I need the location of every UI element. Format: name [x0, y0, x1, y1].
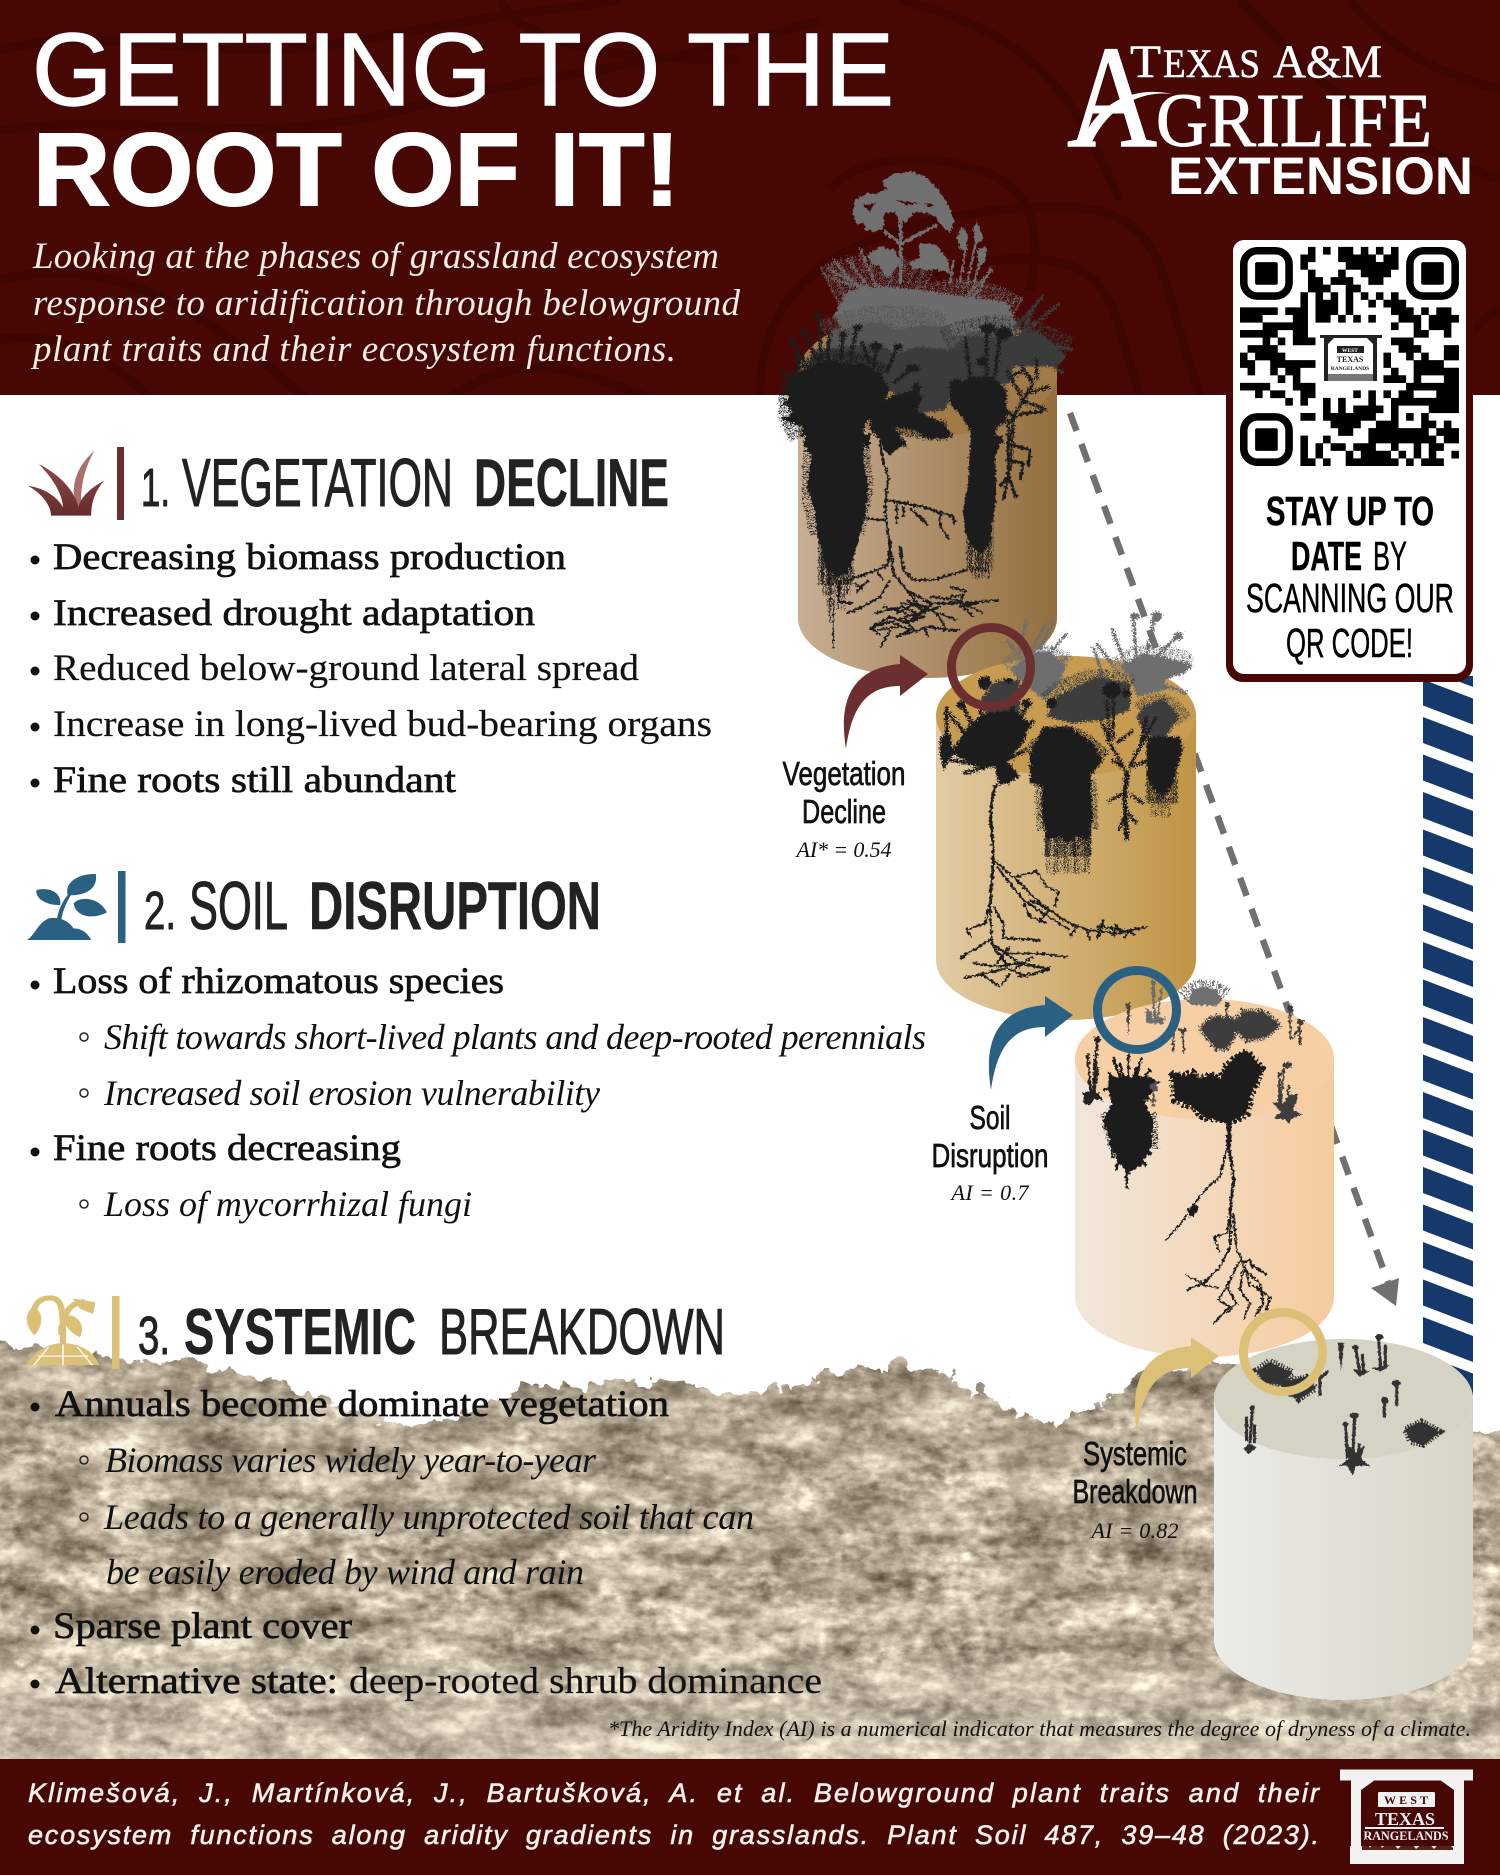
- bullet list: Sparse plant cover: [53, 1606, 352, 1647]
- QR centre mark: West Texas Rangelands: TEXAS: [1337, 355, 1364, 364]
- QR call to action: DATE: [1291, 533, 1362, 579]
- bullet list: Annuals become dominate vegetation: [55, 1384, 669, 1425]
- subtitle: response to aridification through belowground: [33, 283, 740, 324]
- plants: annual remnants: [1243, 1334, 1440, 1475]
- section 1: vegetation decline: 1.: [141, 458, 170, 518]
- citation: [28, 1778, 1320, 1850]
- plant: grasses and flowering clumps: [780, 248, 1073, 470]
- label: systemic breakdown: [1072, 1435, 1198, 1543]
- label: systemic breakdown: Systemic: [1083, 1435, 1187, 1472]
- header band: [0, 0, 1500, 420]
- title: GETTING TO THE: [32, 12, 894, 127]
- arrow: systemic breakdown: [1135, 1337, 1219, 1431]
- cylinder 1: vegetation decline: [780, 172, 1073, 678]
- bullet list: Alternative state:: [55, 1661, 338, 1702]
- QR call to action: QR CODE!: [1286, 620, 1413, 666]
- section 2: soil disruption: SOIL: [189, 868, 288, 944]
- roots: left fibrous mass, right clump, tap root: [803, 412, 1043, 648]
- subtitle: plant traits and their ecosystem functions.: [30, 329, 676, 370]
- logo: Texas A&M AgriLife Extension: A&M: [1273, 36, 1382, 88]
- label: vegetation decline: Vegetation: [782, 755, 906, 792]
- arrow: vegetation decline: [844, 655, 928, 749]
- cylinder 3: soil disruption result: [1075, 980, 1334, 1357]
- dashed trend arrow: [1070, 413, 1399, 1306]
- logo: Texas A&M AgriLife Extension: GRILIFE: [1156, 79, 1432, 163]
- subtitle: [30, 236, 740, 370]
- bullet list: Loss of rhizomatous species: [53, 961, 504, 1002]
- label: vegetation decline: Decline: [802, 793, 886, 830]
- citation: ecosystem functions along aridity gradients in grasslands. Plant Soil 487, 39–48 (2023).: [28, 1820, 1319, 1850]
- bullet list: Increased drought adaptation: [53, 593, 535, 634]
- logo: Texas A&M AgriLife Extension: EXAS: [1163, 41, 1260, 86]
- QR centre mark: West Texas Rangelands: [1320, 335, 1382, 381]
- section 1: vegetation decline: VEGETATION: [182, 445, 453, 521]
- label: vegetation decline: [782, 755, 906, 862]
- label: soil disruption: AI = 0.7: [950, 1180, 1030, 1205]
- QR centre mark: West Texas Rangelands: RANGELANDS: [1331, 366, 1369, 372]
- bullet list: [30, 537, 712, 801]
- icon: seedling: [27, 874, 107, 940]
- logo: West Texas Rangelands: [1340, 1770, 1473, 1864]
- QR centre mark: West Texas Rangelands: WEST: [1342, 348, 1358, 354]
- section 3: systemic breakdown: BREAKDOWN: [439, 1295, 725, 1368]
- icon: grass: [28, 451, 104, 516]
- plant: tall grey forb: [853, 172, 992, 287]
- section 3: systemic breakdown: 3.: [138, 1306, 170, 1366]
- logo: West Texas Rangelands: RANGELANDS: [1364, 1828, 1448, 1843]
- bullet list: Leads to a generally unprotected soil that can: [103, 1497, 754, 1537]
- ring: systemic breakdown transition: [1244, 1312, 1322, 1392]
- logo: Texas A&M AgriLife Extension: A: [1067, 16, 1157, 178]
- section 2: soil disruption: DISRUPTION: [309, 868, 601, 944]
- bullet list: Loss of mycorrhizal fungi: [103, 1184, 472, 1224]
- footnote: *The Aridity Index (AI) is a numerical indicator that measures the degree of dryness of a climate.: [608, 1716, 1471, 1741]
- QR call to action: STAY UP TO: [1266, 488, 1434, 534]
- decorative stripe column: [1423, 676, 1473, 1396]
- bullet list: be easily eroded by wind and rain: [106, 1552, 584, 1592]
- background soil photo band: [0, 1290, 1500, 1760]
- ring: soil disruption transition: [1098, 970, 1176, 1050]
- logo: Texas A&M AgriLife Extension: EXTENSION: [1168, 147, 1473, 206]
- footer band: [0, 1759, 1500, 1875]
- section 1: vegetation decline: [28, 445, 712, 801]
- bullet list: Biomass varies widely year-to-year: [105, 1440, 597, 1480]
- cylinder 4: systemic breakdown: [1214, 1334, 1473, 1700]
- citation: Klimešová, J., Martínková, J., Bartušková, A. et al. Belowground plant traits and their: [28, 1778, 1320, 1808]
- bullet list: Fine roots decreasing: [53, 1128, 401, 1169]
- bullet list: Increase in long-lived bud-bearing organs: [53, 704, 712, 745]
- bullet list: Decreasing biomass production: [53, 537, 566, 578]
- logo: Texas A&M AgriLife Extension: T: [1130, 36, 1161, 88]
- QR code panel: [1226, 233, 1473, 682]
- bullet list: Fine roots still abundant: [53, 760, 457, 801]
- label: systemic breakdown: Breakdown: [1072, 1473, 1198, 1510]
- section 2: soil disruption: 2.: [144, 881, 176, 941]
- label: soil disruption: Disruption: [932, 1137, 1048, 1174]
- plant and roots: degraded grassland stage: [940, 611, 1193, 843]
- title: ROOT OF IT!: [33, 112, 680, 227]
- bullet list: Increased soil erosion vulnerability: [103, 1073, 600, 1113]
- arrow: soil disruption: [989, 996, 1073, 1090]
- icon: wilted plant: [27, 1298, 99, 1365]
- subtitle: Looking at the phases of grassland ecosystem: [32, 236, 719, 277]
- label: soil disruption: [932, 1099, 1048, 1205]
- QR call to action: [1246, 488, 1454, 666]
- section 3: systemic breakdown: [27, 1295, 822, 1702]
- logo: West Texas Rangelands: WEST: [1384, 1793, 1428, 1807]
- ring: vegetation decline transition: [952, 628, 1030, 706]
- QR code: [1240, 251, 1459, 462]
- roots: long tap root and lateral tangles: [960, 783, 1148, 987]
- bullet list: [30, 1384, 822, 1702]
- label: systemic breakdown: AI = 0.82: [1090, 1518, 1178, 1543]
- bullet list: [30, 961, 926, 1224]
- bullet list: Shift towards short-lived plants and deep-rooted perennials: [104, 1017, 926, 1057]
- plants and roots: sparse stage: [1083, 980, 1304, 1323]
- title: [32, 12, 894, 227]
- label: soil disruption: Soil: [970, 1099, 1010, 1136]
- bullet list: Reduced below-ground lateral spread: [53, 648, 640, 689]
- logo: Texas A&M AgriLife Extension: [1067, 16, 1473, 206]
- section 3: systemic breakdown: SYSTEMIC: [184, 1295, 416, 1368]
- bullet list: deep-rooted shrub dominance: [349, 1661, 822, 1702]
- QR call to action: BY: [1373, 533, 1407, 579]
- section 2: soil disruption: [27, 868, 926, 1224]
- label: vegetation decline: AI* = 0.54: [794, 837, 892, 862]
- logo: West Texas Rangelands: TEXAS: [1375, 1809, 1435, 1829]
- cylinder 2: soil disruption: [936, 611, 1196, 1020]
- section 1: vegetation decline: DECLINE: [474, 445, 669, 521]
